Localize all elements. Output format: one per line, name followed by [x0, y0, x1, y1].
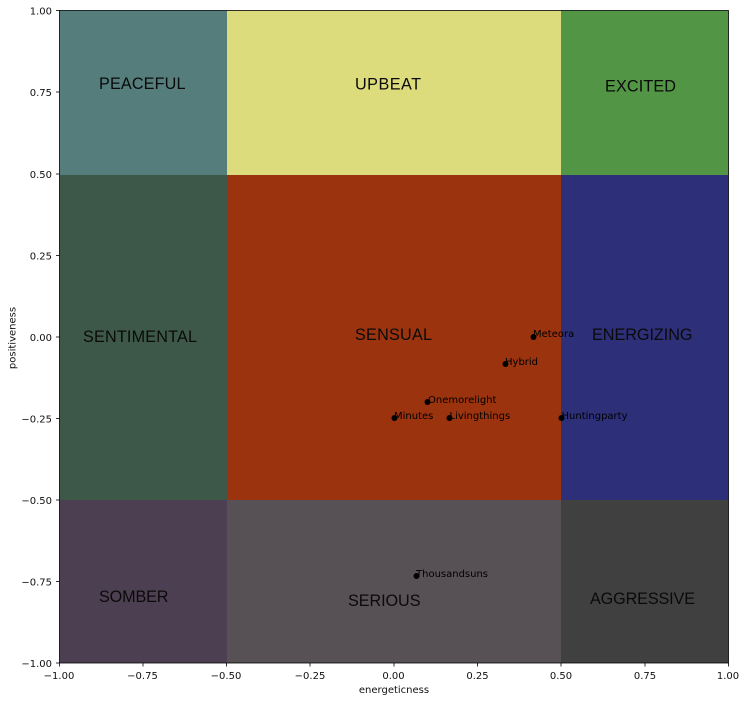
panel: sentimental: SENTIMENTAL	[83, 328, 197, 346]
x axis: 0.75	[634, 671, 656, 682]
y axis: −1.00	[21, 659, 52, 670]
panel: serious	[227, 500, 561, 663]
x axis	[44, 663, 739, 696]
point: Minutes: Minutes	[394, 411, 433, 422]
point: Hybrid: Hybrid	[505, 357, 538, 368]
panel: energizing: ENERGIZING	[592, 326, 692, 344]
x axis title: energeticness	[359, 685, 429, 696]
album data points	[392, 329, 628, 580]
panel: aggressive: AGGRESSIVE	[590, 590, 695, 608]
y axis: −0.75	[21, 578, 52, 588]
panel: somber	[60, 500, 227, 663]
x axis: 1.00	[717, 671, 739, 682]
panel: sensual: SENSUAL	[355, 326, 432, 344]
x axis: 0.50	[550, 671, 572, 682]
x axis: 0.00	[382, 671, 405, 682]
y axis: 0.50	[30, 170, 52, 181]
x axis: 0.25	[466, 671, 489, 682]
y axis	[8, 6, 60, 670]
panel: peaceful: PEACEFUL	[99, 75, 186, 93]
point: Livingthings: Livingthings	[450, 411, 510, 422]
point: Meteora: Meteora	[533, 329, 574, 340]
panel: upbeat	[227, 10, 561, 175]
x axis: −0.75	[127, 671, 158, 682]
panel: energizing	[561, 175, 728, 500]
x axis: −0.50	[211, 671, 241, 682]
panel: somber: SOMBER	[99, 588, 168, 606]
y axis: −0.50	[21, 496, 52, 507]
x axis: −0.25	[295, 671, 325, 682]
panel: sensual	[227, 175, 561, 500]
y axis: 0.25	[30, 252, 52, 262]
point: Thousandsuns: Thousandsuns	[415, 569, 488, 580]
panel: serious: SERIOUS	[348, 592, 421, 610]
y axis: 1.00	[30, 6, 52, 18]
point: Huntingparty: Huntingparty	[562, 411, 628, 422]
point: Onemorelight: Onemorelight	[428, 395, 497, 406]
y axis: 0.00	[30, 333, 52, 344]
y axis: −0.25	[21, 414, 52, 426]
panel: excited	[561, 10, 728, 175]
panel: aggressive	[561, 500, 728, 663]
panel: sentimental	[60, 175, 227, 500]
y axis title: positiveness	[8, 307, 18, 369]
y axis: 0.75	[30, 88, 52, 99]
panel: excited: EXCITED	[605, 78, 676, 96]
panel: upbeat: UPBEAT	[355, 76, 421, 94]
panel: peaceful	[60, 10, 227, 175]
x axis: −1.00	[44, 671, 74, 682]
